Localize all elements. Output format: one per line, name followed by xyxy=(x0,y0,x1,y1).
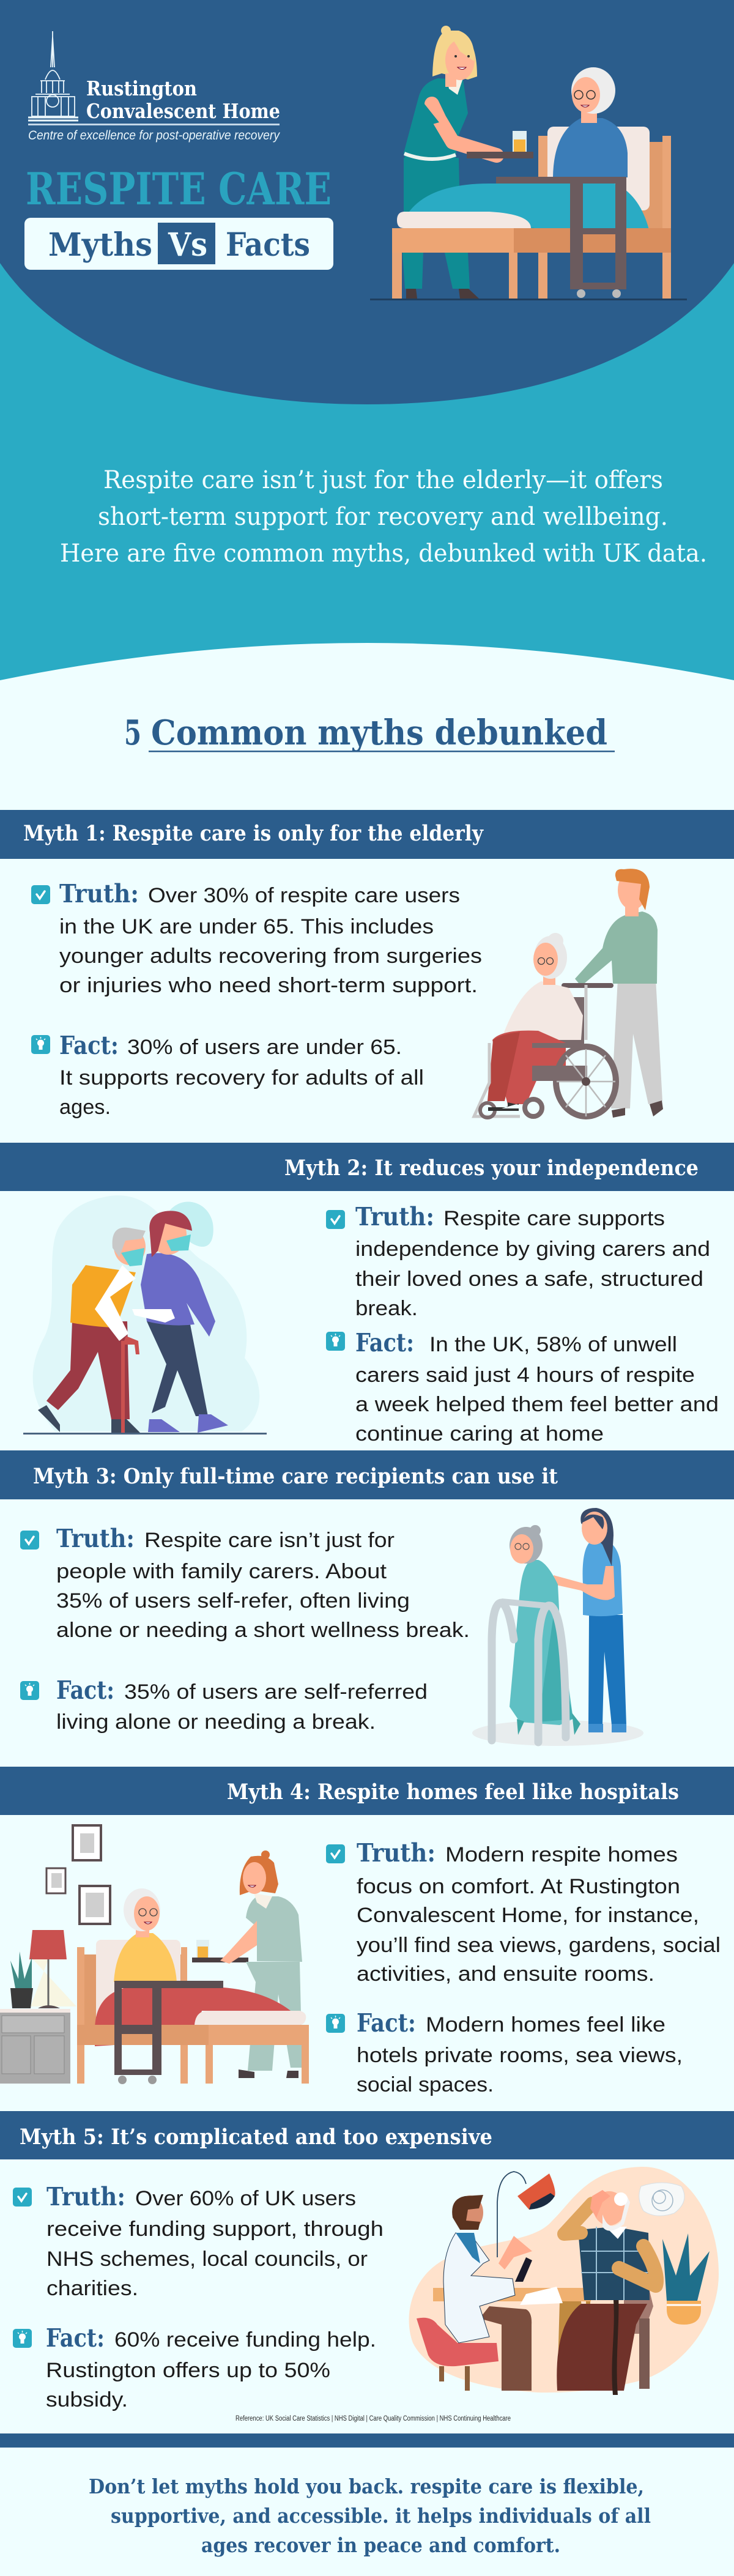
myth 2 fact text: a week helped them feel better and xyxy=(355,1393,719,1416)
myth 1 truth text: Truth: xyxy=(59,879,139,908)
logo xyxy=(28,31,280,143)
myth 1 fact text: 30% of users are under 65. xyxy=(127,1036,402,1059)
myth 3 banner xyxy=(0,1450,734,1499)
myth 1 truth text: or injuries who need short-term support. xyxy=(59,974,478,997)
myth 3 truth text: alone or needing a short wellness break. xyxy=(56,1619,470,1642)
myth 4 truth text: Truth: xyxy=(357,1838,436,1868)
myth 5 fact text: Fact: xyxy=(46,2323,105,2353)
myth 5 truth text: Truth: xyxy=(46,2182,125,2211)
myth 2 truth text: their loved ones a safe, structured xyxy=(355,1268,703,1291)
illustration: doctor consulting older man xyxy=(409,2167,719,2395)
subtitle badge: Myths xyxy=(48,226,152,264)
myth 5 banner: Myth 5: It’s complicated and too expensive xyxy=(20,2125,492,2150)
myth 3 fact text: 35% of users are self-referred xyxy=(124,1680,428,1704)
myth 2 fact text: In the UK, 58% of unwell xyxy=(429,1333,677,1356)
myth 2 truth text: Respite care supports xyxy=(443,1207,665,1230)
myth 2 banner xyxy=(0,1143,734,1191)
myth 4 banner: Myth 4: Respite homes feel like hospitals xyxy=(227,1780,679,1805)
myth 1 truth text: Over 30% of respite care users xyxy=(148,884,460,907)
panel: myth 3 xyxy=(0,1450,734,1746)
panel: myth 4 xyxy=(0,1767,734,2096)
myth 5 truth text: receive funding support, through xyxy=(46,2218,384,2241)
myth 4 truth text: you’ll find sea views, gardens, social xyxy=(357,1934,721,1957)
myth 3 fact text: living alone or needing a break. xyxy=(56,1710,376,1734)
icon: check xyxy=(13,2188,32,2207)
logo: Convalescent Home xyxy=(86,99,280,123)
myth 3 truth text: Respite care isn’t just for xyxy=(144,1529,395,1552)
myth 3 truth text: Truth: xyxy=(56,1524,135,1553)
myth 5 fact text: Rustington offers up to 50% xyxy=(46,2359,330,2382)
icon: check xyxy=(326,1210,345,1229)
myth 2 truth text: break. xyxy=(355,1297,418,1320)
logo tagline: Centre of excellence for post-operative recovery xyxy=(28,128,280,143)
closing message: Don’t let myths hold you back. respite care is flexible, xyxy=(89,2474,644,2498)
section heading: 5 xyxy=(124,713,141,753)
myth 2 fact text: continue caring at home xyxy=(355,1422,604,1446)
myth 5 banner xyxy=(0,2111,734,2159)
intro text: Here are five common myths, debunked with UK data. xyxy=(60,540,707,568)
myth 4 fact text xyxy=(357,2008,683,2096)
myth 1 fact text: ages. xyxy=(59,1096,111,1119)
section heading: Common myths debunked xyxy=(151,713,607,753)
myth 3 fact text xyxy=(56,1676,428,1734)
logo name: Rustington xyxy=(86,76,197,100)
intro text: short-term support for recovery and wellbeing. xyxy=(98,503,668,531)
white wave divider xyxy=(0,643,734,734)
icon: check xyxy=(31,885,50,904)
myth 4 fact text: social spaces. xyxy=(357,2073,494,2096)
myth 3 truth text: people with family carers. About xyxy=(56,1560,387,1583)
title: RESPITE CARE xyxy=(26,163,332,215)
myth 3 fact text: Fact: xyxy=(56,1676,114,1705)
illustration: nurse serving patient in bed xyxy=(370,26,687,300)
myth 1 banner: Myth 1: Respite care is only for the elderly xyxy=(23,821,484,846)
closing divider bar xyxy=(0,2433,734,2448)
subtitle badge xyxy=(24,218,333,270)
closing message: supportive, and accessible. it helps individuals of all xyxy=(111,2504,651,2528)
hero: dark blue arc xyxy=(0,0,734,404)
myth 5 truth text xyxy=(46,2182,384,2300)
subtitle badge: Vs xyxy=(168,226,207,264)
myth 1 fact text: It supports recovery for adults of all xyxy=(59,1066,424,1089)
myth 5 fact text xyxy=(46,2323,376,2411)
intro text: Respite care isn’t just for the elderly—it offers xyxy=(103,466,663,494)
myth 3 truth text xyxy=(56,1524,470,1642)
intro text xyxy=(60,466,707,568)
closing message: ages recover in peace and comfort. xyxy=(201,2533,560,2557)
myth 2 banner: Myth 2: It reduces your independence xyxy=(284,1156,699,1181)
myth 1 fact text xyxy=(59,1031,424,1119)
myth 4 truth text: activities, and ensuite rooms. xyxy=(357,1962,654,1986)
closing message xyxy=(89,2474,651,2557)
myth 4 fact text: Fact: xyxy=(357,2008,416,2038)
myth 1 truth text xyxy=(59,879,482,997)
myth 4 truth text xyxy=(357,1838,721,1986)
icon: check xyxy=(20,1531,39,1550)
icon: lightbulb xyxy=(13,2329,32,2348)
hero: teal band xyxy=(0,0,734,685)
myth 5 fact text: 60% receive funding help. xyxy=(114,2328,376,2351)
myth 5 truth text: NHS schemes, local councils, or xyxy=(46,2248,368,2271)
myth 1 banner xyxy=(0,810,734,859)
panel: myth 5 xyxy=(0,2111,734,2422)
myth 5 truth text: Over 60% of UK users xyxy=(135,2187,356,2210)
myth 1 truth text: younger adults recovering from surgeries xyxy=(59,945,482,968)
myth 2 truth text xyxy=(355,1202,710,1320)
myth 2 truth text: Truth: xyxy=(355,1202,434,1231)
myth 4 truth text: focus on comfort. At Rustington xyxy=(357,1875,680,1898)
icon: clock tower building xyxy=(28,31,78,121)
illustration: carer serving patient in bedroom xyxy=(0,1825,309,2084)
icon: lightbulb xyxy=(326,1332,345,1351)
myth 4 truth text: Convalescent Home, for instance, xyxy=(357,1904,699,1927)
icon: lightbulb xyxy=(326,2014,345,2033)
illustration: couple walking with masks xyxy=(23,1195,267,1435)
icon: lightbulb xyxy=(20,1681,39,1700)
icon: lightbulb xyxy=(31,1035,50,1054)
illustration: man pushing woman in wheelchair xyxy=(474,869,663,1118)
myth 2 fact text: carers said just 4 hours of respite xyxy=(355,1364,695,1387)
myth 4 banner xyxy=(0,1767,734,1815)
panel: myth 2 xyxy=(0,1143,734,1446)
myth 3 truth text: 35% of users self-refer, often living xyxy=(56,1589,410,1613)
myth 2 truth text: independence by giving carers and xyxy=(355,1238,710,1261)
subtitle badge: Facts xyxy=(226,226,310,264)
illustration: carer helping woman with walker xyxy=(472,1508,643,1746)
myth 1 truth text: in the UK are under 65. This includes xyxy=(59,915,434,938)
myth 3 banner: Myth 3: Only full-time care recipients can use it xyxy=(33,1464,558,1489)
myth 1 fact text: Fact: xyxy=(59,1031,119,1060)
myth 2 fact text: Fact: xyxy=(355,1328,414,1357)
references: Reference: UK Social Care Statistics | NHS Digital | Care Quality Commission | NHS Continuing Healthcare xyxy=(235,2415,511,2422)
myth 4 truth text: Modern respite homes xyxy=(445,1843,678,1866)
myth 2 fact text xyxy=(355,1328,719,1446)
myth 5 truth text: charities. xyxy=(46,2277,138,2300)
panel: myth 1 xyxy=(0,810,734,1119)
icon: check xyxy=(326,1844,345,1863)
myth 4 fact text: Modern homes feel like xyxy=(426,2013,665,2036)
myth 4 fact text: hotels private rooms, sea views, xyxy=(357,2044,683,2067)
myth 5 fact text: subsidy. xyxy=(46,2388,128,2411)
